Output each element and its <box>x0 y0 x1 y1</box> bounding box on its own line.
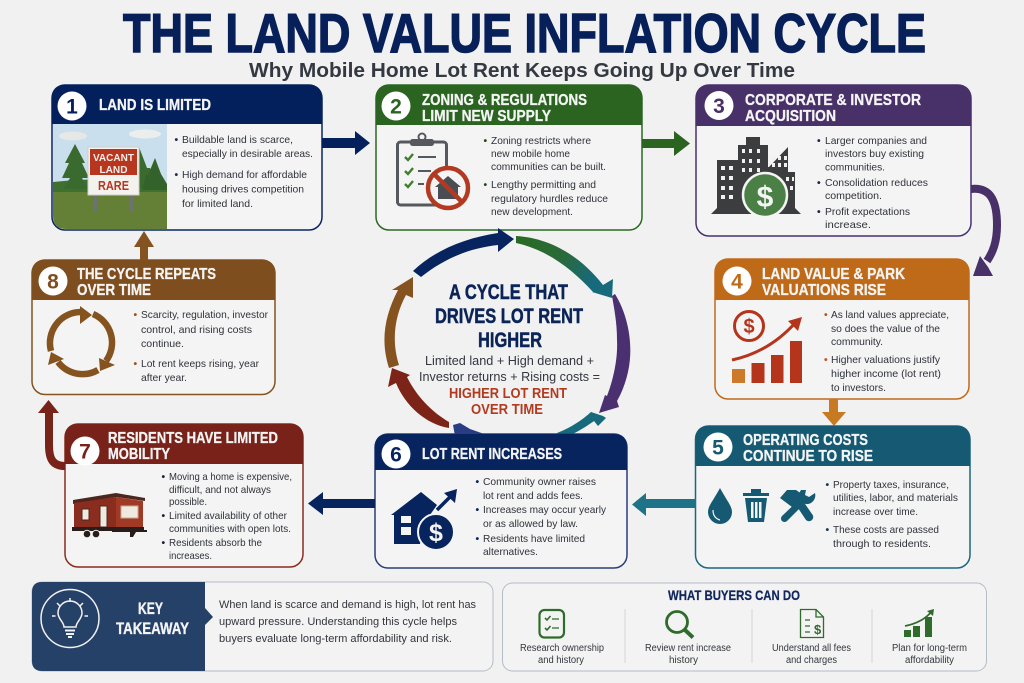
step 3 number <box>704 91 734 120</box>
step 5 text: • <box>826 525 830 536</box>
step 1 text: High demand for affordable <box>182 170 307 181</box>
step 8 text: after year. <box>141 373 187 384</box>
action: understand fees: $ <box>814 622 822 637</box>
step 5 number: 5 <box>712 436 724 460</box>
key takeaway label: KEY <box>138 600 163 618</box>
step 4 heading: LAND VALUE & PARK <box>762 266 906 283</box>
icon: vacant land sign scene: LAND <box>100 164 128 176</box>
step 6 text <box>476 477 607 558</box>
step 8 text: Lot rent keeps rising, year <box>141 359 260 370</box>
center equation: Investor returns + Rising costs = <box>419 370 600 384</box>
step 5 text: Property taxes, insurance, <box>833 480 949 491</box>
step 7 heading <box>108 430 278 463</box>
central cycle ring <box>384 228 630 438</box>
step 3 text: • <box>817 178 821 189</box>
step 8 heading <box>77 266 216 299</box>
step 4 text <box>824 310 949 394</box>
step 6 text: alternatives. <box>483 547 538 558</box>
step 3 text: • <box>817 136 821 147</box>
center result <box>449 386 567 418</box>
center heading: HIGHER <box>478 329 542 352</box>
arrow: step 5 to 6 <box>632 493 696 516</box>
action: understand fees: Understand all fees <box>772 643 851 654</box>
ring segment green to teal <box>516 236 613 298</box>
step 3 text: • <box>817 207 821 218</box>
step 2 text: regulatory hurdles reduce <box>491 194 608 205</box>
step 7 heading: RESIDENTS HAVE LIMITED <box>108 430 278 447</box>
center result: HIGHER LOT RENT <box>449 386 567 402</box>
step 7 text: • <box>162 538 166 549</box>
center heading: DRIVES LOT RENT <box>435 305 583 328</box>
step 2 text: new mobile home <box>491 149 570 160</box>
action: review rent history: history <box>669 655 698 666</box>
icon: water drop <box>708 488 732 524</box>
step 1 text: • <box>174 170 178 181</box>
center result: OVER TIME <box>471 402 543 418</box>
icon: house with rising dollar: $ <box>429 519 443 547</box>
step 6 number: 6 <box>390 444 402 466</box>
step 2 text: • <box>484 136 488 147</box>
step 2 heading <box>422 92 587 125</box>
key takeaway label <box>116 600 189 638</box>
icon: city buildings with dollar: $ <box>757 181 774 214</box>
step 2 text: • <box>484 180 488 191</box>
key takeaway text: upward pressure. Understanding this cycle helps <box>219 616 457 628</box>
step 1 number: 1 <box>66 96 78 118</box>
step 2 heading: LIMIT NEW SUPPLY <box>422 108 552 125</box>
step 7 text: Residents absorb the <box>169 538 262 549</box>
icon: clipboard with no-house symbol <box>398 134 468 208</box>
step 3 text: Profit expectations <box>825 207 910 218</box>
step 8 text: continue. <box>141 339 184 350</box>
step 7 text: Moving a home is expensive, <box>169 472 292 483</box>
step 6 number <box>382 440 410 468</box>
step 5 text: These costs are passed <box>833 525 939 536</box>
action: plan affordability <box>892 609 967 666</box>
arrow: step 8 to 1 <box>134 231 154 260</box>
arrow: step 1 to 2 <box>322 131 370 155</box>
ring segment teal <box>557 412 606 438</box>
arrow: step 7 to 8 <box>38 400 65 466</box>
ring segment brown <box>384 277 413 368</box>
step 8 number: 8 <box>47 270 59 294</box>
panel: step 3 corporate acquisition <box>696 85 971 236</box>
key takeaway label: TAKEAWAY <box>116 620 189 638</box>
center heading: A CYCLE THAT <box>449 281 568 304</box>
step 7 text: Limited availability of other <box>169 511 288 522</box>
step 5 number <box>704 432 732 462</box>
icon: light bulb <box>41 590 99 648</box>
step 1 text: especially in desirable areas. <box>182 149 313 160</box>
action: research ownership <box>520 610 605 666</box>
step 3 text: Larger companies and <box>825 136 927 147</box>
step 5 heading <box>743 432 873 465</box>
center equation <box>419 354 600 384</box>
step 2 text: communities can be built. <box>491 162 606 173</box>
arrow: step 2 to 3 <box>642 131 690 156</box>
step 5 text: utilities, labor, and materials <box>833 493 958 504</box>
action: research ownership: Research ownership <box>520 643 605 654</box>
panel: step 4 land value <box>715 259 969 399</box>
step 8 heading: THE CYCLE REPEATS <box>77 266 216 283</box>
step 7 text: increases. <box>169 551 212 562</box>
step 4 text: higher income (lot rent) <box>831 369 941 380</box>
step 5 text: through to residents. <box>833 539 931 550</box>
step 3 text: investors buy existing <box>825 149 924 160</box>
step 4 text: to investors. <box>831 383 886 394</box>
action: plan affordability: affordability <box>905 655 954 666</box>
panel: step 7 limited mobility <box>65 424 303 567</box>
arrow: step 4 to 5 <box>822 399 846 426</box>
step 7 text <box>162 472 292 562</box>
step 6 text: • <box>476 505 480 516</box>
step 4 heading: VALUATIONS RISE <box>762 282 886 299</box>
step 7 text: possible. <box>169 497 207 508</box>
icon: rising value bar chart: $ <box>743 316 755 338</box>
step 7 number: 7 <box>79 440 91 464</box>
step 3 text: increase. <box>825 220 871 231</box>
step 7 text: • <box>162 511 166 522</box>
icon: trash can <box>743 489 769 522</box>
panel: step 6 lot rent increases <box>375 434 627 568</box>
step 1 text: Buildable land is scarce, <box>182 135 293 146</box>
action: understand fees: and charges <box>786 655 837 666</box>
step 6 text: or as allowed by law. <box>483 519 578 530</box>
icon: mobile home on trailer <box>72 493 147 538</box>
panel: step 5 operating costs <box>696 426 970 568</box>
step 1 number <box>58 92 86 120</box>
step 3 heading <box>745 92 921 125</box>
ring segment navy <box>413 228 514 277</box>
key takeaway text <box>219 599 476 645</box>
step 1 text: housing drives competition <box>182 184 304 196</box>
ring segment purple <box>599 294 630 413</box>
action: review rent history: Review rent increase <box>645 643 732 654</box>
step 8 text: control, and rising costs <box>141 325 252 336</box>
step 7 text: communities with open lots. <box>169 524 291 535</box>
panel: step 8 cycle repeats <box>32 260 275 394</box>
step 4 text: Higher valuations justify <box>831 355 941 366</box>
step 8 heading: OVER TIME <box>77 282 151 299</box>
step 8 text: Scarcity, regulation, investor <box>141 310 269 321</box>
center equation: Limited land + High demand + <box>425 354 594 368</box>
step 3 text <box>817 136 928 231</box>
step 6 text: Increases may occur yearly <box>483 505 607 516</box>
key takeaway text: buyers evaluate long-term affordability and risk. <box>219 633 452 645</box>
panel: key takeaway <box>32 582 493 671</box>
step 8 text: • <box>134 359 138 370</box>
icon: city buildings with dollar <box>711 137 801 217</box>
icon: hammer and wrench <box>780 490 815 522</box>
step 4 text: so does the value of the <box>831 324 940 335</box>
step 5 text <box>826 480 958 550</box>
icon: circular repeat arrows <box>48 306 115 374</box>
subtitle: Why Mobile Home Lot Rent Keeps Going Up Over Time <box>249 60 795 82</box>
step 3 text: communities. <box>825 162 885 174</box>
step 3 text: competition. <box>825 191 882 202</box>
ring segment red <box>388 368 449 428</box>
step 1 heading: LAND IS LIMITED <box>99 97 211 114</box>
step 7 number <box>70 436 100 466</box>
step 6 heading: LOT RENT INCREASES <box>422 446 562 463</box>
ring segment blue bottom <box>453 423 490 436</box>
step 3 text: Consolidation reduces <box>825 178 928 189</box>
icon: vacant land sign scene <box>53 124 167 229</box>
step 4 text: • <box>824 355 828 366</box>
action: review rent history <box>645 612 732 666</box>
step 4 heading <box>762 266 906 299</box>
center heading <box>435 281 583 352</box>
panel: what buyers can do <box>502 583 986 671</box>
key takeaway text: When land is scarce and demand is high, lot rent has <box>219 599 476 611</box>
step 1 text: • <box>174 135 178 146</box>
step 5 heading: CONTINUE TO RISE <box>743 448 873 465</box>
step 6 text: • <box>476 477 480 488</box>
step 1 text: for limited land. <box>182 199 253 210</box>
step 7 text: • <box>162 472 166 483</box>
action: research ownership: and history <box>538 655 584 666</box>
step 1 text <box>174 135 313 210</box>
icon: vacant land sign scene: RARE <box>98 179 129 193</box>
step 8 text: • <box>134 310 138 321</box>
panel: step 2 zoning <box>376 85 642 230</box>
step 3 heading: ACQUISITION <box>745 108 836 125</box>
panel: step 1 land is limited <box>52 85 322 230</box>
step 2 text <box>484 136 608 218</box>
step 5 heading: OPERATING COSTS <box>743 432 868 449</box>
icon: rising value bar chart <box>732 312 802 383</box>
step 2 text: Zoning restricts where <box>491 136 591 147</box>
step 3 number: 3 <box>713 95 725 118</box>
step 2 number <box>382 92 410 120</box>
step 3 heading: CORPORATE & INVESTOR <box>745 92 921 109</box>
step 4 text: As land values appreciate, <box>831 310 949 321</box>
action: plan affordability: Plan for long-term <box>892 643 967 654</box>
buyers heading: WHAT BUYERS CAN DO <box>668 587 800 603</box>
step 4 text: • <box>824 310 828 321</box>
step 5 text: increase over time. <box>833 507 918 518</box>
step 7 text: difficult, and not always <box>169 485 271 496</box>
step 2 text: new development. <box>491 207 573 218</box>
step 4 number: 4 <box>731 270 743 294</box>
step 4 number <box>722 266 752 296</box>
step 2 number: 2 <box>390 96 402 118</box>
step 6 text: Community owner raises <box>483 477 596 488</box>
step 2 heading: ZONING & REGULATIONS <box>422 92 587 109</box>
step 5 text: • <box>826 480 830 491</box>
icon: house with rising dollar <box>391 489 457 550</box>
arrow: step 3 to 4 <box>971 189 997 276</box>
step 6 text: • <box>476 534 480 545</box>
step 4 text: community. <box>831 337 883 348</box>
step 2 text: Lengthy permitting and <box>491 180 596 191</box>
step 6 text: lot rent and adds fees. <box>483 491 583 502</box>
action: understand fees <box>772 610 851 666</box>
step 8 number <box>38 266 68 296</box>
step 7 heading: MOBILITY <box>108 446 171 463</box>
step 8 text <box>134 310 269 384</box>
icon: vacant land sign scene: VACANT <box>93 152 135 164</box>
arrow: step 6 to 7 <box>308 492 375 515</box>
step 6 text: Residents have limited <box>483 534 585 545</box>
